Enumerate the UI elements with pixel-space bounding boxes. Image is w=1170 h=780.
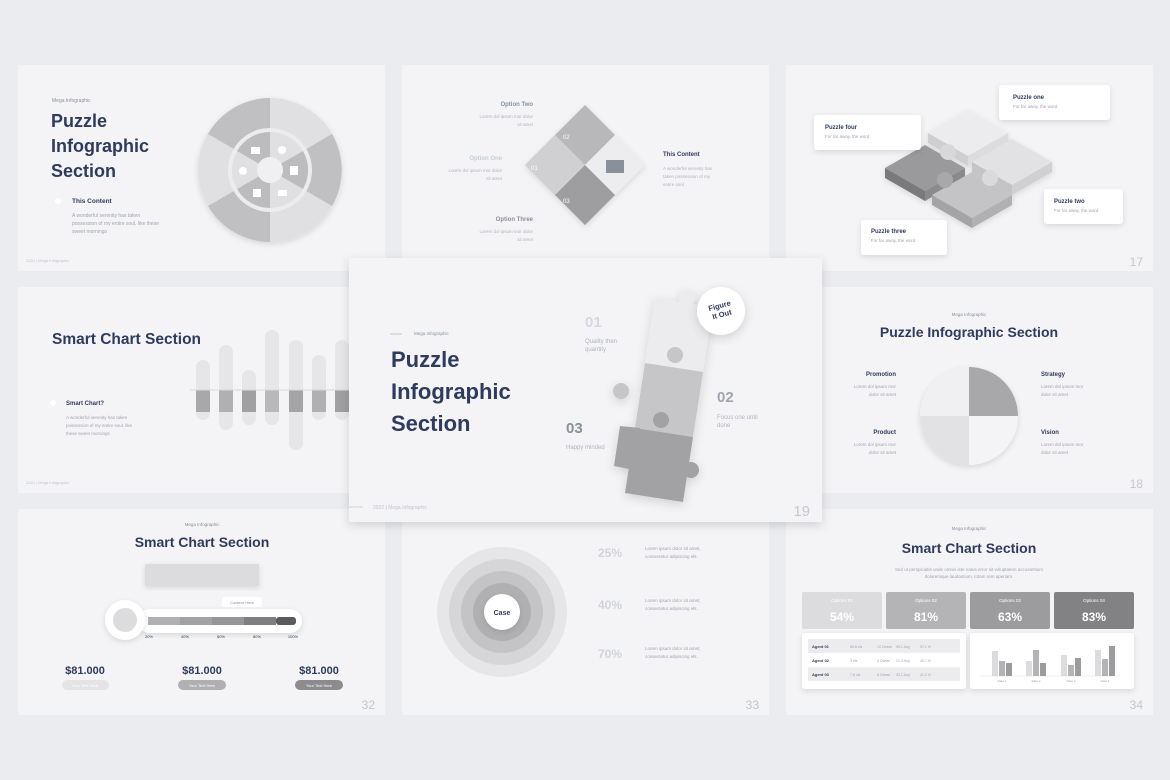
slide 9: smart chart section with stats: Mega Infographic <box>952 526 987 531</box>
callout: puzzle four <box>814 115 921 150</box>
slide 8: concentric circles: Lorem ipsum dolor sit amet, <box>645 546 701 551</box>
chart: thermometer: 60% <box>217 634 225 639</box>
table: 32.1 Avg <box>896 673 910 677</box>
page number 17: 17 <box>1130 255 1143 269</box>
table: 40.7 % <box>920 659 931 663</box>
chart: thermometer: 80% <box>253 634 261 639</box>
table: 6 Ocean <box>877 673 890 677</box>
step 02: Focus one until <box>717 415 758 421</box>
text: vision: Vision <box>1041 430 1059 436</box>
chart: concentric circles: Case <box>494 610 510 617</box>
percentages <box>598 546 622 661</box>
percentages: 25% <box>598 546 622 560</box>
text block: this content: This Content <box>72 198 113 205</box>
slide 1: puzzle infographic section wheel <box>18 65 385 271</box>
stat cards <box>802 592 1134 629</box>
slide 8: concentric circles: Lorem ipsum dolor sit amet, <box>645 598 701 603</box>
stat cards: 63% <box>998 610 1022 624</box>
callout: puzzle three: Puzzle three <box>871 229 907 235</box>
table: Agent 01 <box>812 644 830 649</box>
bar chart <box>970 633 1134 689</box>
text: option two: Lorem dol ipsum mor dolor <box>479 114 533 119</box>
table: 21.3 Avg <box>896 659 910 663</box>
badge: figure it out: It Out <box>711 307 733 321</box>
heading: puzzle infographic section: Puzzle <box>51 111 107 131</box>
values <box>65 665 339 677</box>
heading: Smart Chart Section <box>902 540 1036 556</box>
graphic: puzzle diamond: 01 <box>531 166 538 172</box>
slide 5 (center, featured): puzzle infographic section 19 <box>349 258 822 522</box>
text: strategy: dolor sit amet <box>1041 392 1069 397</box>
callout: puzzle two: Puzzle two <box>1054 199 1085 205</box>
slide 9: smart chart section with stats: 34 <box>1130 698 1143 712</box>
slide 1: puzzle infographic section wheel: 2022 | Mega Infographic <box>26 258 69 263</box>
text block: smart chart: Smart Chart? <box>66 401 104 407</box>
callout: puzzle three: For far away, the word <box>871 238 916 243</box>
slide 8: concentric circles: 33 <box>746 698 759 712</box>
heading: Smart Chart Section <box>135 534 269 550</box>
stat cards: Options 02 <box>915 598 937 603</box>
text: vision: dolor sit amet <box>1041 450 1069 455</box>
text box <box>145 564 259 586</box>
callout: puzzle one: For far away, the word <box>1013 104 1058 109</box>
slide 7: thermometer smart chart: Your Text Here <box>72 683 99 688</box>
text: this content: entire soul <box>663 182 684 187</box>
text: option one: Option One <box>469 156 503 162</box>
heading: puzzle infographic section: Puzzle <box>391 347 459 372</box>
text block: smart chart: A wonderful serenity has taken <box>66 415 128 420</box>
stat cards: 83% <box>1082 610 1106 624</box>
graphic: puzzle stack <box>613 290 713 502</box>
chart: thermometer: 100% <box>288 634 299 639</box>
step 03 <box>566 420 605 451</box>
callout: puzzle two: For far away, the word <box>1054 208 1099 213</box>
bar chart: Data 3 <box>1067 679 1076 683</box>
text: product: dolor sit amet <box>869 450 897 455</box>
slide 8: concentric circles: Lorem ipsum dolor sit amet, <box>645 646 701 651</box>
text block: smart chart <box>50 400 133 436</box>
slide 8: concentric circles: consectetur adipiscing elit. <box>645 654 698 659</box>
footer: 2022 | Mega Infographic <box>373 505 427 511</box>
heading: puzzle infographic section: Section <box>51 161 116 181</box>
callout: puzzle two <box>1044 189 1123 224</box>
slide 8: concentric circles: consectetur adipiscing elit. <box>645 554 698 559</box>
step 01: quantity <box>585 347 606 353</box>
text block: this content: A wonderful serenity has taken <box>72 213 140 219</box>
heading: puzzle infographic section: Infographic <box>51 136 149 156</box>
text: strategy: Strategy <box>1041 372 1066 378</box>
text: promotion: Lorem dol ipsum mor <box>854 384 897 389</box>
chart: thermometer: 20% <box>145 634 153 639</box>
text: option two <box>479 102 534 127</box>
text: this content: This Content <box>663 152 700 158</box>
text: strategy: Lorem dol ipsum mor <box>1041 384 1084 389</box>
slide 7: thermometer smart chart: Your Text Here <box>189 683 216 688</box>
callout: puzzle four: For far away, the word <box>825 134 870 139</box>
slide 9: smart chart section with stats: Sed ut perspiciatis unde omnis iste natus error sit voluptatem accusantium <box>895 567 1043 572</box>
label: mega infographic: Mega Infographic <box>52 98 91 104</box>
step 03: Happy minded <box>566 445 605 451</box>
callout: puzzle one <box>999 85 1110 120</box>
text: promotion: Promotion <box>866 372 896 378</box>
table: 3 cfs <box>850 659 858 663</box>
stat cards: Options 03 <box>999 598 1021 603</box>
text: vision <box>1041 430 1084 455</box>
stat cards: Options 01 <box>831 598 853 603</box>
graphic: 3d puzzle <box>885 110 1052 228</box>
chart: puzzle wheel <box>198 98 342 242</box>
step 03: 03 <box>566 420 583 437</box>
text: option one <box>448 156 503 181</box>
heading: Puzzle Infographic Section <box>880 324 1058 340</box>
text: strategy <box>1041 372 1084 397</box>
table: 7.5 cfs <box>850 673 861 677</box>
heading: smart chart section: Smart Chart Section <box>52 331 201 348</box>
stat cards: Options 04 <box>1083 598 1105 603</box>
slide 4: smart chart pills <box>18 287 385 493</box>
slide 3: 3d puzzle with callouts <box>786 65 1153 271</box>
text: option three: Lorem dol ipsum mor dolor <box>479 229 533 234</box>
text: this content <box>663 152 713 187</box>
slide 7: thermometer smart chart <box>18 509 385 715</box>
slide 7: thermometer smart chart: Your Text Here <box>306 683 333 688</box>
step 02: done <box>717 423 731 429</box>
text: product <box>854 430 897 455</box>
heading: puzzle infographic section: Infographic <box>391 379 511 404</box>
text: option three: sit amet <box>517 237 534 242</box>
text: promotion <box>854 372 897 397</box>
table: 97.1 % <box>920 645 931 649</box>
label: mega infographic: Mega Infographic <box>414 331 450 336</box>
callout: puzzle one: Puzzle one <box>1013 95 1045 101</box>
footer <box>349 505 427 511</box>
step 02: 02 <box>717 389 734 406</box>
step 02 <box>717 389 758 429</box>
slide 2: puzzle diamond options <box>402 65 769 271</box>
text block: this content: possession of my entire soul, like these <box>72 221 159 227</box>
text block: this content: sweet mornings <box>72 229 108 235</box>
percentages: 70% <box>598 647 622 661</box>
values: $81.000 <box>182 665 222 677</box>
callout: puzzle three <box>861 220 947 255</box>
table: Agent 02 <box>812 658 830 663</box>
values: $81.000 <box>299 665 339 677</box>
text: this content: A wonderful serenity has <box>663 166 713 171</box>
badge: figure it out: Figure <box>707 298 732 313</box>
graphic: puzzle diamond <box>525 105 645 225</box>
text block: this content <box>55 198 159 235</box>
stat cards: 81% <box>914 610 938 624</box>
graphic: puzzle diamond: 02 <box>563 135 570 141</box>
text: option one: Lorem dol ipsum mor dolor <box>448 168 502 173</box>
table: 41.2 % <box>920 673 931 677</box>
text: promotion: dolor sit amet <box>869 392 897 397</box>
text: option two: sit amet <box>517 122 534 127</box>
slide 6: puzzle circle four options <box>786 287 1153 493</box>
bar chart: Data 2 <box>1032 679 1041 683</box>
label: mega infographic <box>390 331 450 336</box>
chart: concentric circles <box>437 547 567 677</box>
graphic: puzzle diamond: 03 <box>563 199 570 205</box>
slide 8: concentric circles <box>402 509 769 715</box>
chart: vertical pills <box>190 330 350 450</box>
text block: smart chart: these sweet mornings <box>66 431 111 436</box>
text: vision: Lorem dol ipsum mor <box>1041 442 1084 447</box>
text block: smart chart: possession of my entire soul, like <box>66 423 133 428</box>
table <box>802 633 966 689</box>
bar chart: Data 1 <box>998 679 1007 683</box>
step 01: 01 <box>585 314 602 331</box>
chart: thermometer: 40% <box>181 634 189 639</box>
chart: puzzle circle <box>920 367 1018 465</box>
bar chart: Data 4 <box>1101 679 1110 683</box>
slide 7: thermometer smart chart: Mega Infographic <box>185 522 220 527</box>
table: Agent 03 <box>812 672 830 677</box>
stat cards: 54% <box>830 610 854 624</box>
chart: thermometer <box>105 597 302 640</box>
page number 19: 19 <box>793 503 810 520</box>
percentages: 40% <box>598 598 622 612</box>
callout: puzzle four: Puzzle four <box>825 125 858 131</box>
values: $81.000 <box>65 665 105 677</box>
table: 10 Ocean <box>877 645 892 649</box>
text: this content: taken possession of my <box>663 174 711 179</box>
badge: figure it out <box>697 287 745 335</box>
label: Mega Infographic <box>952 312 987 317</box>
slide 8: concentric circles: consectetur adipiscing elit. <box>645 606 698 611</box>
slide 7: thermometer smart chart: 32 <box>362 698 375 712</box>
text: option one: sit amet <box>486 176 503 181</box>
table: 80.5 cfs <box>850 645 863 649</box>
heading: puzzle infographic section: Section <box>391 411 470 436</box>
step 01 <box>585 314 617 353</box>
text: product: Lorem dol ipsum mor <box>854 442 897 447</box>
slide 9: smart chart section with stats <box>786 509 1153 715</box>
slide 4: smart chart pills: 2022 | Mega Infographic <box>26 480 69 485</box>
text: option three <box>479 217 534 242</box>
text: product: Product <box>873 430 896 436</box>
table: 3 Ocean <box>877 659 890 663</box>
step 01: Quality then <box>585 339 617 345</box>
text: option three: Option Three <box>496 217 534 223</box>
slide 9: smart chart section with stats: doloremque laudantium, totam rem aperiam. <box>925 574 1013 579</box>
table: 96.1 Avg <box>896 645 910 649</box>
text: option two: Option Two <box>500 102 533 108</box>
page number 18: 18 <box>1130 477 1143 491</box>
chart: thermometer: Content Here <box>230 600 255 605</box>
